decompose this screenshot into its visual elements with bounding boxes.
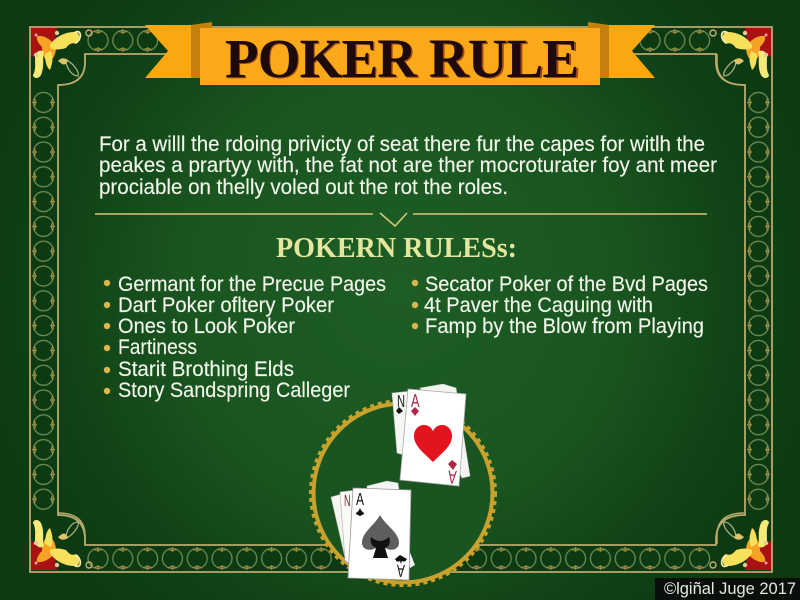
divider with chevron	[95, 213, 707, 226]
gold gear ring	[311, 401, 495, 585]
playing cards: ace of hearts: N	[397, 393, 405, 412]
bullet text left: Story Sandspring Calleger	[118, 378, 350, 402]
title text: POKER RULE	[225, 28, 579, 89]
bullet list: left column	[104, 272, 386, 402]
bullet text left: Germant for the Precue Pages	[118, 272, 386, 296]
footer copyright bar: ©lgiñal Juge 2017	[664, 580, 796, 598]
playing cards: ace of hearts	[392, 384, 470, 486]
playing cards: ace of hearts: A	[411, 392, 420, 412]
playing cards: ace of spades: A	[396, 560, 405, 580]
title ribbon	[145, 22, 655, 90]
bullet text right: Famp by the Blow from Playing	[425, 314, 704, 338]
icon: spade	[362, 515, 399, 558]
icon: heart	[414, 425, 452, 462]
bullet markers right	[412, 280, 418, 329]
intro paragraph: prociable on thelly voled out the rot the roles.	[99, 175, 508, 199]
intro paragraph: For a willl the rdoing privicty of seat there fur the capes for witlh the	[99, 132, 705, 156]
playing cards: ace of hearts: A	[447, 466, 457, 486]
corner ornament: bottom left	[31, 513, 92, 570]
bullet markers left	[104, 280, 110, 394]
playing cards: ace of spades: A	[356, 490, 364, 510]
corner ornament: top right	[710, 28, 771, 85]
intro paragraph: peakes a prartyy with, the fat not are ther mocroturater foy ant meer	[99, 153, 717, 177]
corner ornament: top left	[31, 28, 92, 85]
bullet list: right column	[412, 272, 708, 338]
intro paragraph	[99, 132, 717, 199]
bullet text right: 4t Paver the Caguing with	[424, 293, 653, 317]
playing cards: ace of spades	[331, 481, 415, 580]
section heading: POKERN RULESs:	[276, 233, 517, 264]
bullet text right: Secator Poker of the Bvd Pages	[425, 272, 708, 296]
bullet text left: Dart Poker ofltery Poker	[118, 293, 334, 317]
bullet text left: Ones to Look Poker	[118, 314, 295, 338]
bullet text left: Starit Brothing Elds	[118, 357, 294, 381]
bullet text right	[424, 272, 708, 338]
playing cards: ace of spades: N	[344, 491, 351, 510]
corner ornament: bottom right	[710, 513, 771, 570]
bullet text left: Fartiness	[118, 335, 197, 359]
title text: POKER RULE	[226, 29, 581, 90]
bullet text left	[118, 272, 386, 402]
